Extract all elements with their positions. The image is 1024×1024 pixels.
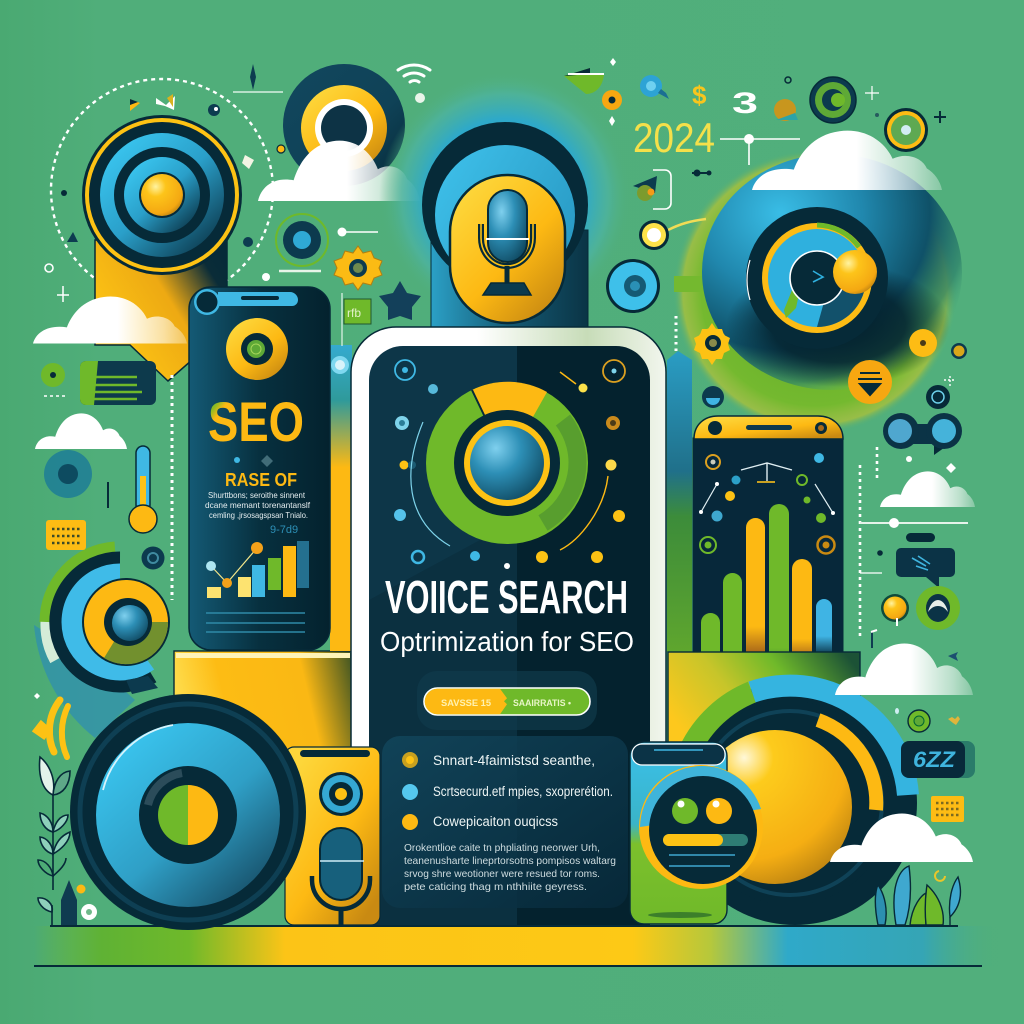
bullet list: Scrtsecurd.etf mpies, sxoprerétion. — [433, 784, 613, 799]
icon: yellow tile — [931, 796, 964, 822]
right dotted lines and slider — [860, 447, 968, 640]
right tag: 6ZZ: 6ZZ — [913, 747, 957, 772]
dotted connector — [674, 316, 678, 356]
yellow disc — [82, 578, 170, 666]
inner ring — [688, 701, 892, 905]
panel: right big dial — [673, 681, 917, 925]
cloud: left top — [33, 297, 187, 344]
icon: dark star — [379, 281, 421, 320]
panel: top speaker ring — [283, 64, 405, 186]
icon: thermometer — [108, 446, 157, 533]
icon: filter badge — [848, 360, 892, 404]
paragraph: srvog shre weotioner were resued tor roms. — [404, 868, 600, 880]
bullet list: Snnart-4faimistsd seanthe, — [433, 753, 595, 768]
timeline connector — [720, 134, 800, 165]
icon: left plants — [38, 757, 70, 925]
icon: gear with tile — [334, 246, 382, 324]
yellow ball — [833, 250, 877, 294]
dots — [234, 455, 273, 467]
icon: microphone — [481, 190, 533, 295]
paragraph: teanenusharte lineprtorsotns pompisos waltarg — [404, 855, 616, 867]
phone frame — [351, 327, 666, 780]
sphere — [698, 730, 852, 884]
pin body — [95, 240, 227, 381]
panel: microphone badge — [379, 71, 631, 328]
panel: right globe — [673, 150, 962, 434]
camera notch — [194, 289, 298, 315]
subheading: RASE OF — [225, 470, 297, 490]
paragraph — [404, 842, 616, 893]
panel: left SEO phone — [189, 287, 330, 650]
text block: dcane memant torenantanslf — [205, 500, 311, 510]
text block — [205, 490, 311, 520]
right side small discs — [702, 329, 967, 409]
scale icons — [699, 453, 835, 554]
green blob — [673, 150, 957, 434]
cloud: lower right upper — [835, 644, 973, 695]
yellow arc — [818, 720, 876, 810]
halo — [379, 71, 631, 323]
speaker disc — [70, 694, 306, 930]
bar chart — [701, 504, 832, 673]
panel: right phone with bars — [693, 416, 843, 673]
split core — [158, 785, 218, 845]
icon: gear with tile: rfb — [347, 306, 361, 320]
blue blob — [702, 154, 962, 390]
pill control: SAAIRRATIS • — [513, 698, 571, 708]
icon: chat bubble — [896, 548, 955, 588]
cloud: left middle — [35, 413, 127, 449]
text block: Shurttbons; seroithe sinnent — [208, 490, 306, 500]
yellow header — [694, 416, 843, 439]
dotted line left — [170, 375, 174, 600]
cloud: top-right — [752, 131, 942, 190]
icon: binoculars — [883, 413, 962, 455]
icon: small dark ring — [142, 546, 164, 570]
bullet list: Cowepicaiton ouqicss — [433, 814, 558, 829]
panel: big left speaker group — [70, 694, 380, 930]
pill control — [417, 671, 597, 730]
icon: camera and gear cluster — [276, 214, 378, 271]
icon: dark pill — [906, 533, 935, 542]
orbit icons — [45, 64, 285, 302]
dial — [746, 207, 888, 349]
small chart label: 9-7d9 — [270, 524, 298, 536]
icon: green message box — [80, 361, 156, 405]
icon: green badge — [916, 586, 960, 630]
small bracket and arrow icons — [633, 170, 712, 209]
subtitle: Optrimization for SEO — [380, 626, 634, 657]
pill control: SAVSSE 15 — [441, 698, 492, 709]
icon: green ring — [810, 77, 856, 123]
icon: blue disc — [606, 259, 660, 313]
bar chart — [206, 541, 309, 632]
cloud: lower right bottom — [830, 814, 973, 862]
dashed orbit around target — [51, 79, 273, 301]
icon: ring connector — [639, 219, 706, 250]
strip between left phone and main phone — [330, 345, 352, 651]
icon: dollar sign: $ — [692, 80, 707, 110]
phone screen — [369, 346, 517, 925]
teal side columns — [667, 351, 692, 652]
panel: yellow box left — [174, 651, 352, 771]
dark dome — [422, 122, 588, 288]
thin connector and blue bead — [331, 293, 349, 374]
panel: green box right — [668, 652, 860, 752]
icon: yellow ring — [884, 108, 928, 152]
bullet list — [402, 752, 613, 830]
icon: yellow sound waves — [34, 700, 68, 757]
icon: orange ball — [871, 594, 909, 648]
yellow lens — [226, 318, 288, 380]
donut chart — [426, 382, 588, 544]
cloud: top centre-left — [258, 141, 420, 201]
screen dots and arcs — [394, 360, 625, 569]
yellow pill — [450, 175, 565, 323]
left column small icons — [41, 363, 66, 396]
icon: right plants — [875, 866, 960, 925]
panel: yellow target pin — [82, 115, 242, 381]
icon: yellow dot tile — [46, 520, 86, 550]
concentric target — [82, 115, 242, 275]
top-right small icons — [564, 58, 946, 126]
outer ring — [673, 681, 917, 925]
year label: 2024 — [633, 114, 715, 161]
paragraph: Orokentlioe caite tn phpliating neorwer Urh, — [404, 842, 600, 854]
smiley face — [639, 765, 763, 889]
blue dome — [435, 145, 575, 285]
panel: left swirl — [34, 549, 170, 738]
paragraph: pete caticing thag m nthhiite geyress. — [404, 881, 587, 893]
icon: left tower and badges — [34, 693, 97, 925]
panel: main phone — [351, 327, 666, 925]
right tag: 6ZZ — [901, 741, 975, 778]
icon: halftone disc — [44, 450, 92, 498]
icon: wifi — [398, 65, 430, 103]
panel: small smiley device — [630, 742, 763, 924]
panel: features — [382, 736, 628, 908]
yellow device — [285, 747, 380, 925]
bottom ground band — [34, 925, 1000, 967]
right lower small icons — [895, 652, 960, 881]
text block: cemling ,jrsosagspsan Tnialo. — [209, 510, 308, 520]
heading: SEO: SEO — [208, 390, 304, 453]
column — [431, 230, 588, 328]
title: VOIICE SEARCH — [385, 571, 628, 623]
icon: yellow gear — [694, 323, 730, 365]
icon: letter glyph: 3 — [732, 87, 758, 120]
cloud: right middle — [880, 471, 975, 507]
